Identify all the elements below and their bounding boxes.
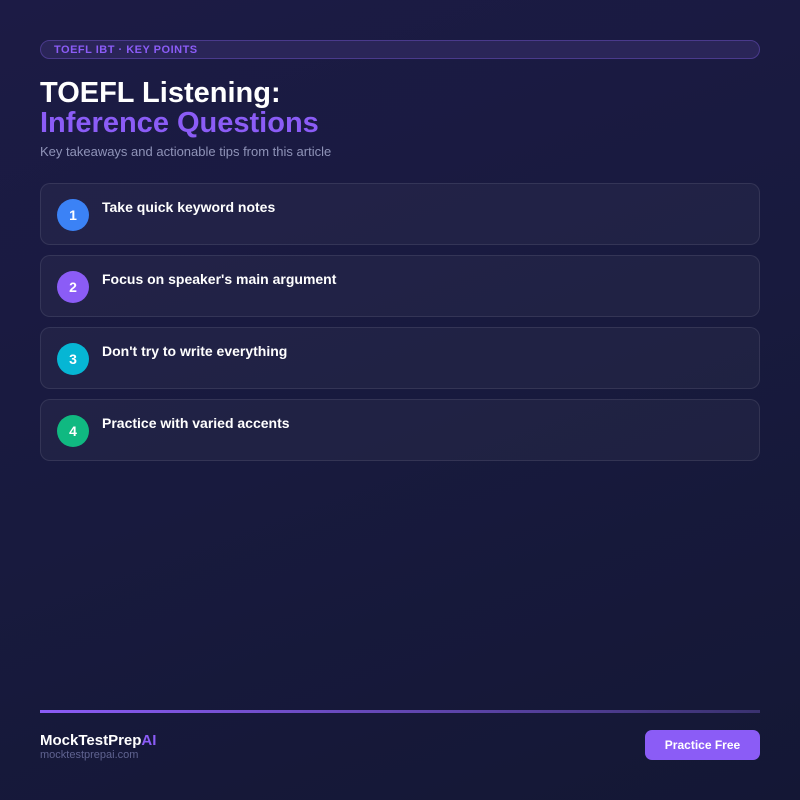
card 4: 4 [69,423,77,439]
card 3 [40,327,760,389]
tag pill [40,40,760,59]
brand: MockTestPrepAI [40,732,156,749]
card 4 [40,399,760,461]
card 1 [40,183,760,245]
card 1: 1 [69,207,77,223]
card 2: Focus on speaker's main argument [102,271,336,287]
card 3: Don't try to write everything [102,343,287,359]
divider line [40,710,760,713]
card 2 [40,255,760,317]
card 4: Practice with varied accents [102,415,290,431]
button [645,730,760,760]
tag pill: TOEFL IBT · KEY POINTS [54,44,198,56]
subtitle: Key takeaways and actionable tips from this article [40,144,331,159]
title: Inference Questions [40,107,319,139]
button: Practice Free [665,738,740,752]
card 2: 2 [69,279,77,295]
brand: mocktestprepai.com [40,749,138,761]
card 3: 3 [69,351,77,367]
brand [40,732,156,761]
card 1: Take quick keyword notes [102,199,275,215]
title [40,77,319,139]
title: TOEFL Listening: [40,77,281,109]
